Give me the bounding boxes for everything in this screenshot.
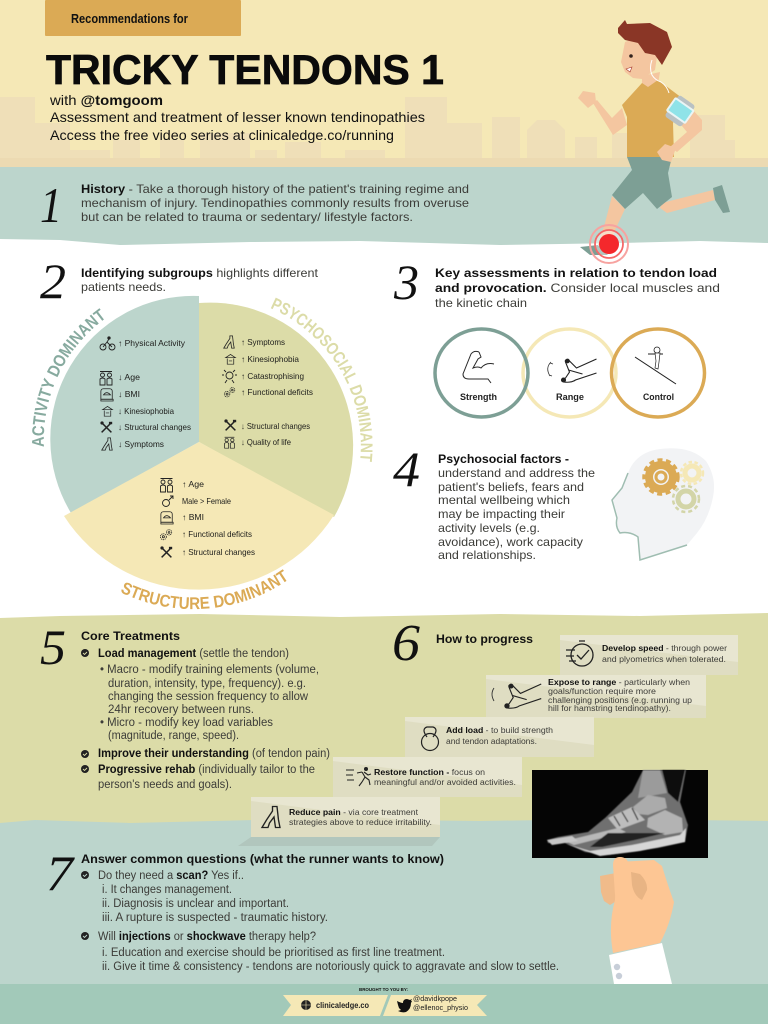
questions list: ii. Diagnosis is unclear and important. [102, 898, 289, 910]
hair [618, 20, 672, 65]
psychosocial text: may be impacting their [438, 507, 565, 521]
back leg [660, 190, 715, 213]
staircase step: develop speed [560, 635, 738, 675]
history text: but can be related to trauma or sedentary/ lifestyle factors. [81, 210, 413, 224]
treatments list: Load management (settle the tendon) [98, 648, 289, 660]
number 3: 3 [393, 254, 419, 310]
treatments list: 24hr recovery between runs. [108, 704, 254, 716]
key assessments text [435, 266, 720, 310]
list: structure dominant factors: Male > Female [182, 496, 231, 506]
psychosocial text: understand and address the [438, 466, 595, 480]
circle: control [612, 329, 704, 417]
staircase step: reduce pain: Reduce pain - via core treatment [289, 807, 419, 817]
background: city skyline [0, 97, 768, 167]
list: activity dominant factors: ↓ Kinesiophobia [118, 406, 174, 416]
list: activity dominant factors: ↑ Physical Activity [118, 338, 186, 348]
psychosocial text: and relationships. [438, 548, 536, 562]
label: psychosocial dominant: PSYCHOSOCIAL DOMINANT [270, 298, 373, 462]
questions list [98, 870, 559, 973]
circle: control: Control [643, 392, 674, 402]
background: mint questions band [0, 819, 768, 984]
staircase step: develop speed: and plyometrics when tolerated. [602, 654, 726, 664]
psychosocial text: avoidance), work capacity [438, 535, 583, 549]
psychosocial text [438, 452, 595, 562]
segment: psychosocial [199, 303, 353, 517]
front shoe [580, 245, 608, 255]
number 1: 1 [40, 177, 62, 233]
segment: activity [50, 296, 199, 513]
treatments list: changing the session frequency to allow [108, 691, 309, 703]
ribbon: twitter handles [383, 995, 487, 1016]
step 7: common questions [46, 845, 559, 973]
treatments list: • Macro - modify training elements (volume, [100, 664, 319, 676]
ribbon: twitter handles: @ellenoc_physio [413, 1005, 468, 1012]
header tab: Recommendations for [45, 0, 241, 36]
list: activity dominant factors [100, 337, 191, 450]
history text [81, 182, 469, 224]
history text: mechanism of injury. Tendinopathies commonly results from overuse [81, 196, 469, 210]
neck [642, 72, 660, 88]
back shoe [713, 185, 730, 213]
treatments list: Progressive rehab (individually tailor to the [98, 764, 315, 776]
title: TRICKY TENDONS 1 [46, 46, 444, 93]
psychosocial text: Psychosocial factors - [438, 452, 569, 466]
history text: History - Take a thorough history of the patient's training regime and [81, 182, 469, 196]
list: psychosocial dominant factors: ↓ Quality of life [241, 437, 291, 447]
staircase step: develop speed: Develop speed - through power [602, 643, 727, 653]
staircase step: restore function: meaningful and/or avoided activities. [374, 777, 516, 787]
staircase step: expose to range [486, 675, 706, 718]
number 7: 7 [46, 845, 75, 901]
subgroups text: patients needs. [81, 280, 166, 294]
header tab: Recommendations for: Recommendations for [71, 11, 188, 26]
step 5: core treatments [40, 619, 330, 791]
segment: structure [64, 442, 334, 590]
step 2: subgroups heading [40, 253, 319, 309]
staircase step: add load: Add load - to build strength [446, 725, 553, 735]
background: cream header band [0, 0, 768, 170]
ribbon: website: clinicaledge.co [316, 1001, 369, 1010]
how to progress heading: How to progress [436, 632, 533, 646]
list: structure dominant factors [160, 478, 255, 557]
icon: head with gears [612, 448, 714, 560]
shorts [612, 157, 672, 209]
check bullets [81, 649, 89, 773]
core treatments heading: Core Treatments [81, 629, 180, 643]
image: foot MRI scan [532, 770, 708, 858]
questions list: iii. A rupture is suspected - traumatic history. [102, 912, 328, 924]
list: structure dominant factors: ↑ Structural changes [182, 547, 255, 557]
background: footer band [0, 984, 768, 1024]
staircase step: restore function: Restore function - focus on [374, 767, 485, 777]
number 5: 5 [40, 619, 66, 675]
list: structure dominant factors: ↑ Functional deficits [182, 529, 252, 539]
list: psychosocial dominant factors: ↑ Kinesiophobia [241, 354, 299, 364]
subtitle block: with @tomgoom [49, 92, 163, 108]
psychosocial text: activity levels (e.g. [438, 521, 540, 535]
brought to you by label: BROUGHT TO YOU BY: [359, 987, 408, 992]
label: structure dominant: STRUCTURE DOMINANT [121, 569, 286, 610]
subgroups text [81, 266, 319, 294]
step 4: psychosocial factors [393, 441, 714, 562]
shirt [622, 80, 682, 157]
illustration: hand holding scan [600, 857, 674, 984]
staircase step: reduce pain [238, 797, 440, 846]
number 2: 2 [40, 253, 66, 309]
treatments list: • Micro - modify key load variables [100, 717, 273, 729]
list: activity dominant factors: ↓ Structural changes [118, 422, 191, 432]
staircase step: expose to range: challenging positions (e.g. running up [548, 695, 692, 705]
subtitle block: Access the free video series at clinicaledge.co/running [50, 127, 394, 143]
psychosocial text: mental wellbeing which [438, 493, 570, 507]
questions list: i. Education and exercise should be prioritised as first line treatment. [102, 947, 445, 959]
background: olive treatment band [0, 613, 768, 826]
step 1: history [40, 177, 469, 233]
treatments list: person's needs and goals). [98, 779, 232, 791]
label: activity dominant: ACTIVITY DOMINANT [32, 308, 104, 447]
staircase step: expose to range: hill for hamstring tendinopathy). [548, 703, 671, 713]
list: psychosocial dominant factors: ↑ Catastrophising [241, 371, 304, 381]
list: structure dominant factors: ↑ Age [182, 479, 204, 489]
questions list: Will injections or shockwave therapy help? [98, 931, 316, 943]
staircase step: expose to range: goals/function require more [548, 686, 656, 696]
ribbon: website [283, 995, 388, 1016]
staircase step: add load: and tendon adaptations. [446, 736, 537, 746]
ribbon: twitter handles: @davidkpope [413, 996, 457, 1003]
questions heading: Answer common questions (what the runner wants to know) [81, 852, 444, 866]
list: structure dominant factors: ↑ BMI [182, 512, 204, 522]
treatments list: Improve their understanding (of tendon pain) [98, 748, 330, 760]
right arm [670, 98, 702, 152]
circle: strength [435, 329, 528, 417]
subtitle block: Assessment and treatment of lesser known tendinopathies [50, 109, 425, 125]
footer credits [283, 987, 487, 1016]
staircase step: restore function [333, 757, 522, 797]
list: psychosocial dominant factors: ↑ Symptoms [241, 337, 285, 347]
number 6: 6 [392, 615, 420, 672]
illustration: runner [578, 20, 730, 255]
front leg and shoe [598, 196, 625, 248]
circle: strength: Strength [460, 392, 497, 402]
step 6: how to progress [238, 615, 738, 846]
armband phone [663, 93, 697, 129]
key assessments text: and provocation. Consider local muscles and [435, 281, 720, 295]
circle: range: Range [556, 392, 584, 402]
psychosocial text: patient's beliefs, fears and [438, 480, 584, 494]
key assessments text: the kinetic chain [435, 296, 527, 310]
eye and mouth [626, 54, 633, 72]
questions list: i. It changes management. [102, 884, 232, 896]
list: activity dominant factors: ↓ Age [118, 372, 140, 382]
list: activity dominant factors: ↓ Symptoms [118, 439, 164, 449]
face [621, 36, 658, 79]
list: psychosocial dominant factors: ↓ Structural changes [241, 421, 310, 431]
staircase step: add load [405, 717, 594, 757]
icon: pain target [590, 225, 628, 263]
treatments list: (magnitude, range, speed). [108, 730, 239, 742]
question bullets [81, 871, 89, 940]
step 3: key assessments [393, 254, 720, 417]
left arm [593, 100, 627, 135]
subgroups text: Identifying subgroups highlights different [81, 266, 319, 280]
circle: range [523, 329, 616, 417]
treatments list: duration, intensity, type, frequency). e.g. [108, 678, 306, 690]
left fist [578, 91, 596, 108]
list: activity dominant factors: ↓ BMI [118, 389, 140, 399]
list: psychosocial dominant factors: ↑ Functional deficits [241, 387, 313, 397]
questions list: ii. Give it time & consistency - tendons are notoriously quick to aggravate and slow to settle. [102, 961, 559, 973]
earphone wire [650, 60, 669, 93]
questions list: Do they need a scan? Yes if.. [98, 870, 244, 882]
treatments list [98, 648, 330, 791]
subtitle block [49, 92, 425, 143]
key assessments text: Key assessments in relation to tendon load [435, 266, 717, 280]
background: mint history band [0, 167, 768, 245]
staircase step: reduce pain: strategies above to reduce irritability. [289, 817, 432, 827]
pie chart: subgroups [32, 296, 373, 610]
number 4: 4 [393, 441, 420, 497]
list: psychosocial dominant factors [222, 336, 313, 448]
right fist [657, 144, 676, 162]
staircase step: expose to range: Expose to range - particularly when [548, 677, 690, 687]
